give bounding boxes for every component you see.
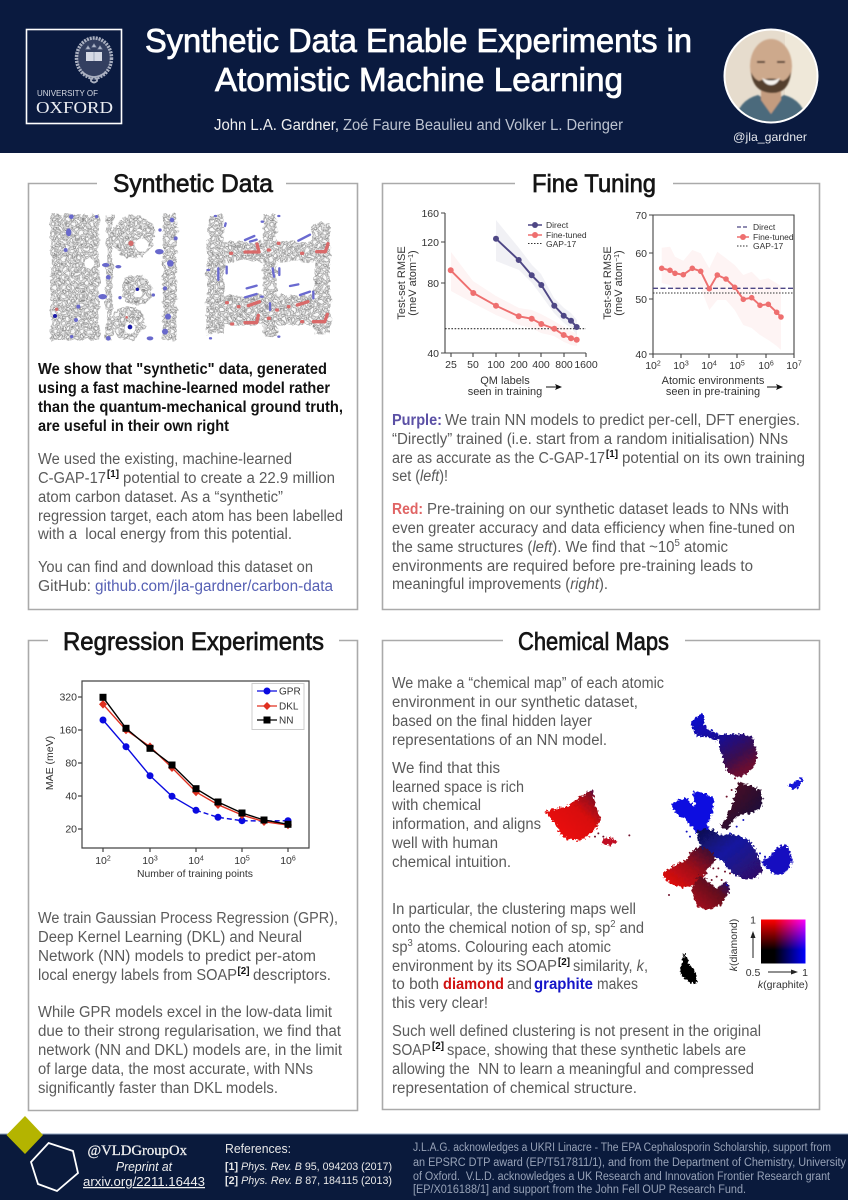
- text: learned space: well with human: [391, 835, 498, 852]
- authors: Zoé Faure Beaulieu and Volker L. Deringer: [343, 117, 623, 134]
- authors: [214, 117, 623, 134]
- chart: RMSE vs QM labels: 200: [510, 359, 528, 371]
- text: regression conclusions: of large data, the most accurate, with NNs: [38, 1061, 313, 1078]
- chart: RMSE vs atomic environments: 5: [741, 360, 745, 368]
- text: references: [1] Phys. Rev. B 95, 094203 (2017): [225, 1161, 392, 1173]
- chart: RMSE vs atomic environments: Fine-tuned: [753, 232, 794, 242]
- chart: MAE vs training points: 10: [234, 855, 246, 867]
- heading: chemical maps: Chemical Maps: [518, 628, 669, 656]
- chart: MAE vs training points: Number of training points: [137, 868, 253, 880]
- legend: colour map: k(diamond): [728, 919, 740, 971]
- chart: RMSE vs QM labels: 160: [421, 208, 439, 220]
- text: clustering explanation: [392, 901, 648, 1012]
- legend: colour map: 1: [750, 914, 756, 926]
- chart: UMAP chemical map clusters: [544, 713, 803, 984]
- chart: RMSE vs atomic environments: Test-set RMSE: [602, 246, 614, 320]
- text: clustering explanation: similarity, k,: [573, 958, 648, 975]
- chart: RMSE vs QM labels: Test-set RMSE: [396, 246, 408, 320]
- chart: MAE vs training points: MAE (meV): [44, 736, 56, 790]
- chart: MAE vs training points: 2: [107, 856, 111, 862]
- text: clustering explanation: this very clear!: [392, 995, 488, 1012]
- text: models used: We train Gaussian Process Regression (GPR),: [38, 910, 338, 927]
- logo: University of Oxford: [26, 30, 122, 124]
- chart: RMSE vs QM labels: Fine-tuned: [546, 230, 587, 240]
- chart: RMSE vs atomic environments: 40: [635, 349, 647, 361]
- text: regression conclusions: significantly faster than DKL models.: [38, 1080, 278, 1097]
- chart: RMSE vs atomic environments: 50: [635, 294, 647, 306]
- text: clustering explanation: graphite: [534, 976, 593, 993]
- text: models used: Network (NN) models to predict per-atom: [38, 948, 316, 965]
- text: dataset description: with a local energy from this potential.: [37, 526, 292, 543]
- text: download link: You can find and download this dataset on: [38, 559, 313, 576]
- chart: RMSE vs QM labels: Direct: [546, 220, 569, 230]
- chart: MAE vs training points: 5: [246, 856, 250, 862]
- text: SOAP comparison: space, showing that these synthetic labels are: [447, 1042, 746, 1059]
- chart: MAE vs training points: DKL: [279, 702, 299, 712]
- chart: RMSE vs QM labels: 400: [532, 359, 550, 371]
- text: clustering explanation: environment by its SOAP: [392, 958, 557, 975]
- text: clustering explanation: sp: [392, 939, 408, 956]
- title: Atomistic Machine Learning: [215, 61, 623, 98]
- chart: RMSE vs atomic environments: 3: [685, 360, 689, 368]
- logo: University of Oxford: OXFORD: [36, 98, 113, 117]
- heading: synthetic data: Synthetic Data: [113, 170, 273, 198]
- chart: RMSE vs QM labels: −1: [408, 254, 415, 262]
- text: learned space: We find that this: [392, 760, 500, 777]
- text: purple explanation: set (left)!: [392, 468, 448, 485]
- text: dataset description: regression target, each atom has been labelled: [38, 508, 343, 525]
- text: clustering explanation: and: [507, 976, 532, 993]
- text: SOAP comparison: Such well defined clustering is not present in the original: [392, 1023, 761, 1040]
- chart: RMSE vs atomic environments: Direct: [753, 222, 776, 232]
- text: regression conclusions: [38, 1004, 343, 1097]
- chart: RMSE vs atomic environments: ): [613, 250, 625, 254]
- text: group and preprint: [83, 1143, 205, 1189]
- text: red explanation: atomic: [680, 539, 728, 556]
- chart: MAE vs training points: 10: [280, 855, 292, 867]
- text: learned space: chemical intuition.: [392, 854, 511, 871]
- text: SOAP comparison: allowing the NN to learn a meaningful and compressed: [392, 1061, 754, 1078]
- chart: RMSE vs QM labels: 800: [555, 359, 573, 371]
- text: clustering explanation: atoms. Colouring each atomic: [413, 939, 611, 956]
- text: red explanation: meaningful improvements (right).: [392, 576, 608, 593]
- text: regression conclusions: network (NN and DKL) models are, in the limit: [38, 1042, 343, 1059]
- chart: RMSE vs atomic environments: 10: [786, 360, 798, 372]
- text: dataset description: potential to create a 22.9 million: [123, 470, 335, 487]
- chart: RMSE vs atomic environments: 60: [635, 248, 647, 260]
- heading: regression experiments: Regression Experiments: [63, 628, 324, 656]
- image: carbon structure, pore view: [207, 215, 331, 338]
- author photo: [724, 28, 818, 124]
- panel: chemical maps: [382, 628, 820, 1110]
- text: clustering explanation: In particular, the clustering maps well: [392, 901, 636, 918]
- chart: MAE vs training points: 80: [65, 758, 77, 770]
- text: clustering explanation: 3: [408, 938, 413, 949]
- logo: University of Oxford: UNIVERSITY OF: [37, 88, 98, 98]
- text: models used: [38, 910, 338, 984]
- text: clustering explanation: diamond: [443, 976, 504, 993]
- text: clustering explanation: [2]: [558, 956, 570, 968]
- text: references: [2] Phys. Rev. B 87, 184115 (2013): [225, 1175, 392, 1187]
- chart: RMSE vs QM labels: [396, 208, 598, 398]
- text: SOAP comparison: representation of chemical structure.: [392, 1080, 637, 1097]
- text: clustering explanation: makes: [597, 976, 638, 993]
- text: dataset description: [1]: [107, 468, 119, 480]
- text: group and preprint: Preprint at: [116, 1160, 173, 1174]
- text: key finding: using a fast machine-learned model rather: [38, 380, 330, 397]
- image: carbon structure, nanotube view: [51, 214, 178, 341]
- text: group and preprint: @VLDGroupOx: [88, 1143, 188, 1159]
- text: dataset description: [37, 451, 343, 543]
- chart: MAE vs training points: 40: [65, 790, 77, 802]
- text: purple explanation: [1]: [606, 448, 618, 460]
- text: purple explanation: We train NN models to predict per-cell, DFT energies.: [445, 412, 800, 429]
- chart: MAE vs training points: 160: [59, 724, 77, 736]
- chart: RMSE vs atomic environments: 10: [729, 360, 741, 372]
- text: learned space: information, and aligns: [392, 816, 541, 833]
- text: group and preprint: arxiv.org/2211.16443: [83, 1175, 205, 1189]
- text: acknowledgements: of Oxford. V.L.D. acknowledges a UK Research and Innovation Frontier Research grant: [413, 1171, 831, 1183]
- chart: RMSE vs QM labels: 100: [487, 359, 505, 371]
- chart: RMSE vs atomic environments: −1: [614, 254, 621, 262]
- title: Synthetic Data Enable Experiments in: [145, 22, 692, 59]
- text: dataset description: We used the existing, machine-learned: [38, 451, 292, 468]
- text: red explanation: 5: [674, 538, 680, 549]
- panel: synthetic data: [28, 170, 358, 610]
- legend: colour map: [728, 914, 808, 991]
- text: models used: descriptors.: [253, 967, 331, 984]
- legend: colour map: 0.5: [746, 967, 760, 979]
- chart: RMSE vs atomic environments: 10: [701, 360, 713, 372]
- chart: RMSE vs atomic environments: 4: [713, 360, 717, 368]
- chart: MAE vs training points: GPR: [279, 686, 301, 698]
- chart: MAE vs training points: 6: [292, 856, 296, 862]
- text: purple explanation: “Directly” trained (i.e. start from a random initialisation) NNs: [392, 431, 788, 448]
- text: clustering explanation: onto the chemical notion of sp, sp: [392, 920, 623, 937]
- title: [145, 22, 692, 98]
- panel: fine tuning: [382, 170, 820, 610]
- text: chemical map intro: based on the final hidden layer: [392, 713, 592, 730]
- text: key finding: than the quantum-mechanical ground truth,: [38, 399, 343, 416]
- text: learned space: learned space is rich: [392, 779, 524, 796]
- chart: RMSE vs QM labels: QM labels: [480, 375, 530, 387]
- text: key finding: We show that "synthetic" data, generated: [38, 361, 327, 378]
- chart: MAE vs training points: 3: [154, 856, 158, 862]
- chart: RMSE vs QM labels: 50: [467, 359, 479, 371]
- chart: MAE vs training points: 320: [59, 692, 77, 704]
- text: key finding: [38, 361, 343, 435]
- text: models used: local energy labels from SOAP: [38, 967, 237, 984]
- authors: John L.A. Gardner,: [214, 117, 339, 134]
- text: clustering explanation: to both: [392, 976, 439, 993]
- text: learned space: with chemical: [391, 797, 481, 814]
- text: purple explanation: potential on its own training: [622, 450, 805, 467]
- icon: diamond: [6, 1116, 43, 1154]
- chart: RMSE vs QM labels: 40: [427, 348, 439, 360]
- chart: RMSE vs QM labels: 1600: [574, 359, 598, 371]
- heading: fine tuning: Fine Tuning: [532, 170, 656, 198]
- chart: RMSE vs atomic environments: Atomic environments: [662, 375, 765, 387]
- footer band: [0, 1116, 848, 1200]
- text: purple explanation: are as accurate as the C-GAP-17: [392, 450, 605, 467]
- text: download link: GitHub:: [38, 578, 91, 595]
- chart: RMSE vs atomic environments: (meV atom: [613, 262, 625, 316]
- text: chemical map intro: [392, 675, 664, 749]
- chart: RMSE vs atomic environments: 70: [635, 210, 647, 222]
- chart: RMSE vs atomic environments: 10: [758, 360, 770, 372]
- legend: colour map: 1: [802, 967, 808, 979]
- header band: [0, 0, 848, 153]
- handle: @jla_gardner: [733, 130, 807, 144]
- chart: RMSE vs QM labels: (meV atom: [407, 262, 419, 316]
- legend: colour map: k(graphite): [758, 979, 808, 991]
- text: chemical map intro: We make a “chemical map” of each atomic: [392, 675, 664, 692]
- text: red explanation: environments are required before pre-training leads to: [392, 558, 753, 575]
- text: models used: Deep Kernel Learning (DKL) and Neural: [38, 929, 302, 946]
- chart: MAE vs training points: 10: [95, 855, 107, 867]
- text: references: References:: [225, 1141, 291, 1156]
- text: clustering explanation: and: [615, 920, 644, 937]
- chart: RMSE vs atomic environments: GAP-17: [753, 241, 784, 251]
- text: learned space: [391, 760, 541, 871]
- panel: regression experiments: [28, 628, 358, 1110]
- text: models used: [2]: [238, 965, 250, 977]
- chart: RMSE vs atomic environments: seen in pre-training: [666, 386, 760, 398]
- icon: hexagon: [31, 1143, 78, 1191]
- text: SOAP comparison: [392, 1023, 761, 1097]
- text: acknowledgements: [EP/X016188/1] and support from the John Fell OUP Research Fund.: [413, 1184, 746, 1196]
- chart: RMSE vs QM labels: ): [407, 250, 419, 254]
- text: regression conclusions: While GPR models excel in the low-data limit: [38, 1004, 333, 1021]
- text: red explanation: the same structures (left). We find that ~10: [392, 539, 679, 556]
- chart: RMSE vs atomic environments: 7: [798, 360, 802, 368]
- text: download link: [38, 559, 333, 595]
- text: chemical map intro: representations of an NN model.: [392, 732, 607, 749]
- text: chemical map intro: environment in our synthetic dataset,: [392, 694, 638, 711]
- text: SOAP comparison: SOAP: [392, 1042, 431, 1059]
- chart: MAE vs training points: NN: [279, 716, 293, 726]
- text: red explanation: [392, 501, 795, 593]
- chart: MAE vs training points: [44, 681, 309, 880]
- chart: RMSE vs atomic environments: 10: [673, 360, 685, 372]
- text: references: [225, 1141, 392, 1187]
- chart: RMSE vs QM labels: 120: [421, 237, 439, 249]
- chart: RMSE vs atomic environments: 2: [657, 360, 661, 368]
- text: dataset description: atom carbon dataset. As a “synthetic”: [38, 489, 283, 506]
- text: red explanation: Red:: [392, 501, 423, 518]
- text: purple explanation: Purple:: [392, 412, 442, 429]
- chart: MAE vs training points: 4: [200, 856, 204, 862]
- text: dataset description: C-GAP-17: [38, 470, 106, 487]
- chart: MAE vs training points: 10: [188, 855, 200, 867]
- chart: MAE vs training points: 10: [142, 855, 154, 867]
- text: acknowledgements: [413, 1142, 846, 1196]
- text: download link: github.com/jla-gardner/carbon-data: [95, 578, 333, 595]
- text: SOAP comparison: [2]: [432, 1040, 444, 1052]
- chart: MAE vs training points: 20: [65, 824, 77, 836]
- chart: RMSE vs QM labels: 80: [427, 278, 439, 290]
- text: clustering explanation: 2: [610, 919, 616, 930]
- text: key finding: are useful in their own right: [38, 418, 229, 435]
- chart: RMSE vs QM labels: 25: [445, 359, 457, 371]
- text: regression conclusions: due to their strong regularisation, we find that: [38, 1023, 342, 1040]
- text: purple explanation: [392, 412, 805, 485]
- chart: RMSE vs QM labels: GAP-17: [546, 239, 577, 249]
- chart: RMSE vs atomic environments: 6: [770, 360, 774, 368]
- chart: RMSE vs atomic environments: 10: [645, 360, 657, 372]
- chart: RMSE vs atomic environments: [602, 210, 802, 398]
- chart: RMSE vs QM labels: seen in training: [468, 386, 542, 398]
- text: red explanation: even greater accuracy and data efficiency when fine-tuned on: [392, 520, 795, 537]
- text: red explanation: Pre-training on our synthetic dataset leads to NNs with: [427, 501, 789, 518]
